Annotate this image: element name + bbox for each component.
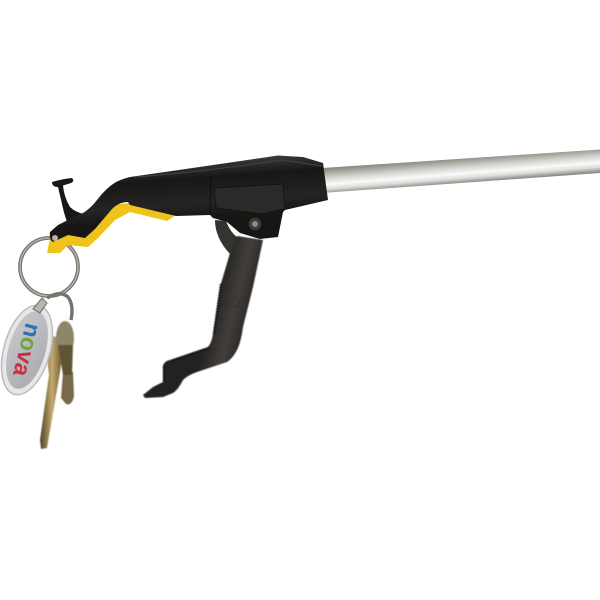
handle body highlights: [135, 160, 322, 214]
fob logo: nova: [8, 321, 46, 379]
fob loop: [33, 298, 47, 313]
black handle body: [50, 156, 328, 242]
small split ring: [47, 294, 72, 320]
key fob: [0, 299, 62, 401]
lever grip: [143, 236, 263, 398]
lever inner curve: [215, 220, 238, 254]
keys: [40, 321, 74, 449]
pivot rivet: [248, 217, 262, 231]
aluminium tube: [322, 150, 600, 193]
handle tip hook: [52, 178, 84, 228]
key ring: [20, 238, 78, 296]
short key: [61, 372, 74, 404]
rivet at handle tip: [52, 235, 58, 241]
yellow trigger edge: [47, 203, 176, 253]
long key: [40, 335, 64, 449]
